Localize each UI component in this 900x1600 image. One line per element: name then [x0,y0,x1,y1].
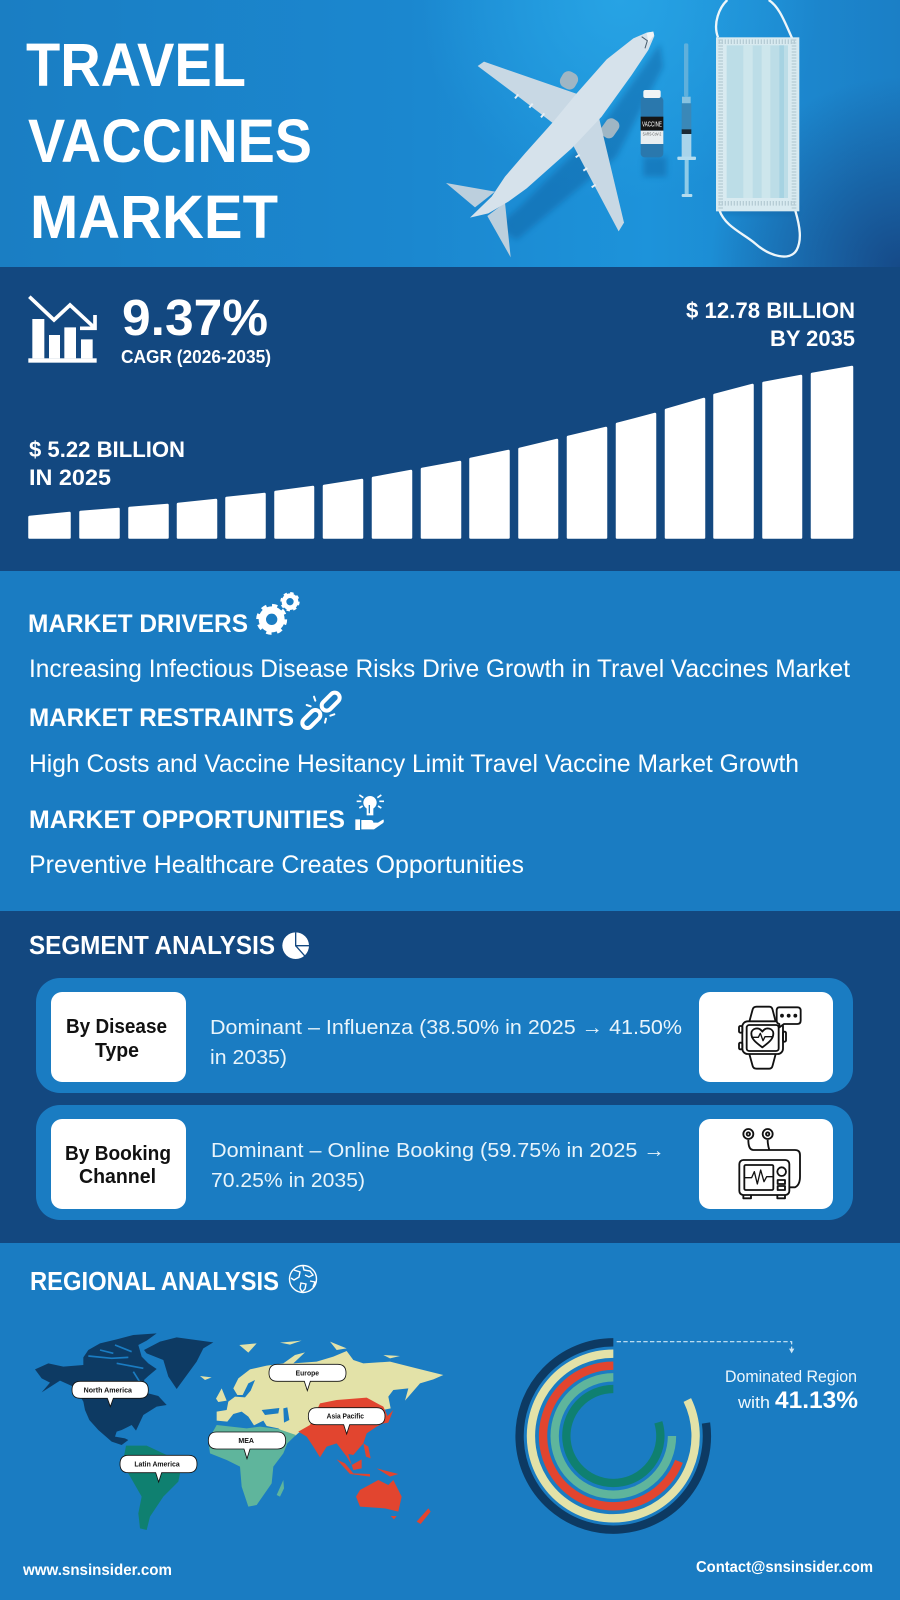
plane [446,32,654,257]
CAGR value: 9.37% [122,289,268,346]
footer: contact: Contact@snsinsider.com [696,1559,873,1576]
icon: globe [290,1266,316,1292]
world map [35,1333,443,1530]
text: influenza: in 2035) [210,1046,287,1069]
text: online booking: 70.25% in 2035) [211,1169,365,1192]
region: Latin America [123,1446,180,1530]
text: drivers: Increasing Infectious Disease Risks Drive Growth in Travel Vaccines Market [29,655,850,683]
callout: dominated region: Dominated Region [725,1368,857,1386]
label: by booking channel: Channel [79,1166,156,1188]
arrow: dashed leader [617,1342,794,1353]
syringe [677,43,696,197]
title: MARKET [30,183,278,251]
2035 value: BY 2035 [770,326,855,351]
region: Middle East and Africa [208,1425,296,1507]
callout: dominated region: with [737,1394,770,1412]
vaccine vial [641,90,663,157]
callout: MEA: MEA [238,1438,254,1445]
text: online booking [211,1139,665,1192]
callout: Europe [269,1364,346,1391]
header banner [0,0,900,267]
text: opportunities: Preventive Healthcare Creates Opportunities [29,851,524,879]
icon: smartwatch [699,992,833,1082]
label: by booking channel [51,1119,186,1209]
panel: market size [0,267,900,571]
label: by booking channel: By Booking [65,1143,171,1165]
vaccine vial: VACCINE [642,122,662,129]
footer: website: www.snsinsider.com [22,1562,172,1579]
callout: dominated region: 41.13% [775,1387,858,1414]
callout: MEA [208,1432,286,1459]
icon: pie chart [282,932,310,959]
heading: regional analysis: REGIONAL ANALYSIS [30,1268,279,1296]
2035 value: $ 12.78 BILLION [686,298,855,323]
callout: North America [72,1381,148,1407]
region: North America [35,1333,213,1445]
2025 value [29,437,185,490]
heading: market restraints: MARKET RESTRAINTS [29,704,294,732]
panel: regional analysis [0,1243,900,1600]
callout: Europe: Europe [296,1371,319,1378]
label: by disease type [51,992,186,1082]
text: online booking: Dominant – Online Booking (59.75% in 2025 → [211,1139,665,1162]
label: by disease type: By Disease [66,1016,167,1038]
icon: bulb in hand [355,795,384,830]
region: Asia Pacific [298,1398,431,1524]
photo: plane, vial, syringe and mask [446,0,800,257]
icon: patient monitor [699,1119,833,1209]
panel: segment analysis [0,911,900,1243]
title: TRAVEL [26,31,246,99]
2035 value [686,298,855,351]
icon: gears [258,593,298,633]
2025 value: $ 5.22 BILLION [29,437,185,462]
heading: market opportunities: MARKET OPPORTUNITIES [29,806,345,834]
text: influenza: Dominant – Influenza (38.50% in 2025 → 41.50% [210,1016,682,1039]
text: restraints: High Costs and Vaccine Hesitancy Limit Travel Vaccine Market Growth [29,750,799,778]
title [26,31,312,251]
card: by disease type [36,978,853,1093]
callout: Asia Pacific: Asia Pacific [327,1414,364,1421]
callout: North America: North America [84,1387,132,1394]
title: VACCINES [28,107,312,175]
face mask [716,0,800,257]
heading: market drivers: MARKET DRIVERS [28,610,248,638]
vaccine vial: SARS-CoV-2 [643,132,662,137]
icon: broken chain [300,691,342,730]
card: by booking channel [36,1105,853,1220]
radial bar chart [520,1342,794,1530]
callout: Latin America: Latin America [134,1461,180,1468]
callout: Asia Pacific [308,1408,385,1434]
icon: growth chart [28,297,97,363]
bar chart [30,367,852,538]
region: Europe and North Asia [200,1341,443,1436]
callout: Latin America [120,1455,197,1482]
label: by disease type: Type [95,1040,139,1062]
panel: market dynamics [0,571,900,911]
CAGR label: CAGR (2026-2035) [121,347,271,367]
2025 value: IN 2025 [29,465,111,490]
heading: segment analysis: SEGMENT ANALYSIS [29,930,275,960]
callout: dominated region [725,1368,858,1414]
text: influenza [210,1016,682,1069]
